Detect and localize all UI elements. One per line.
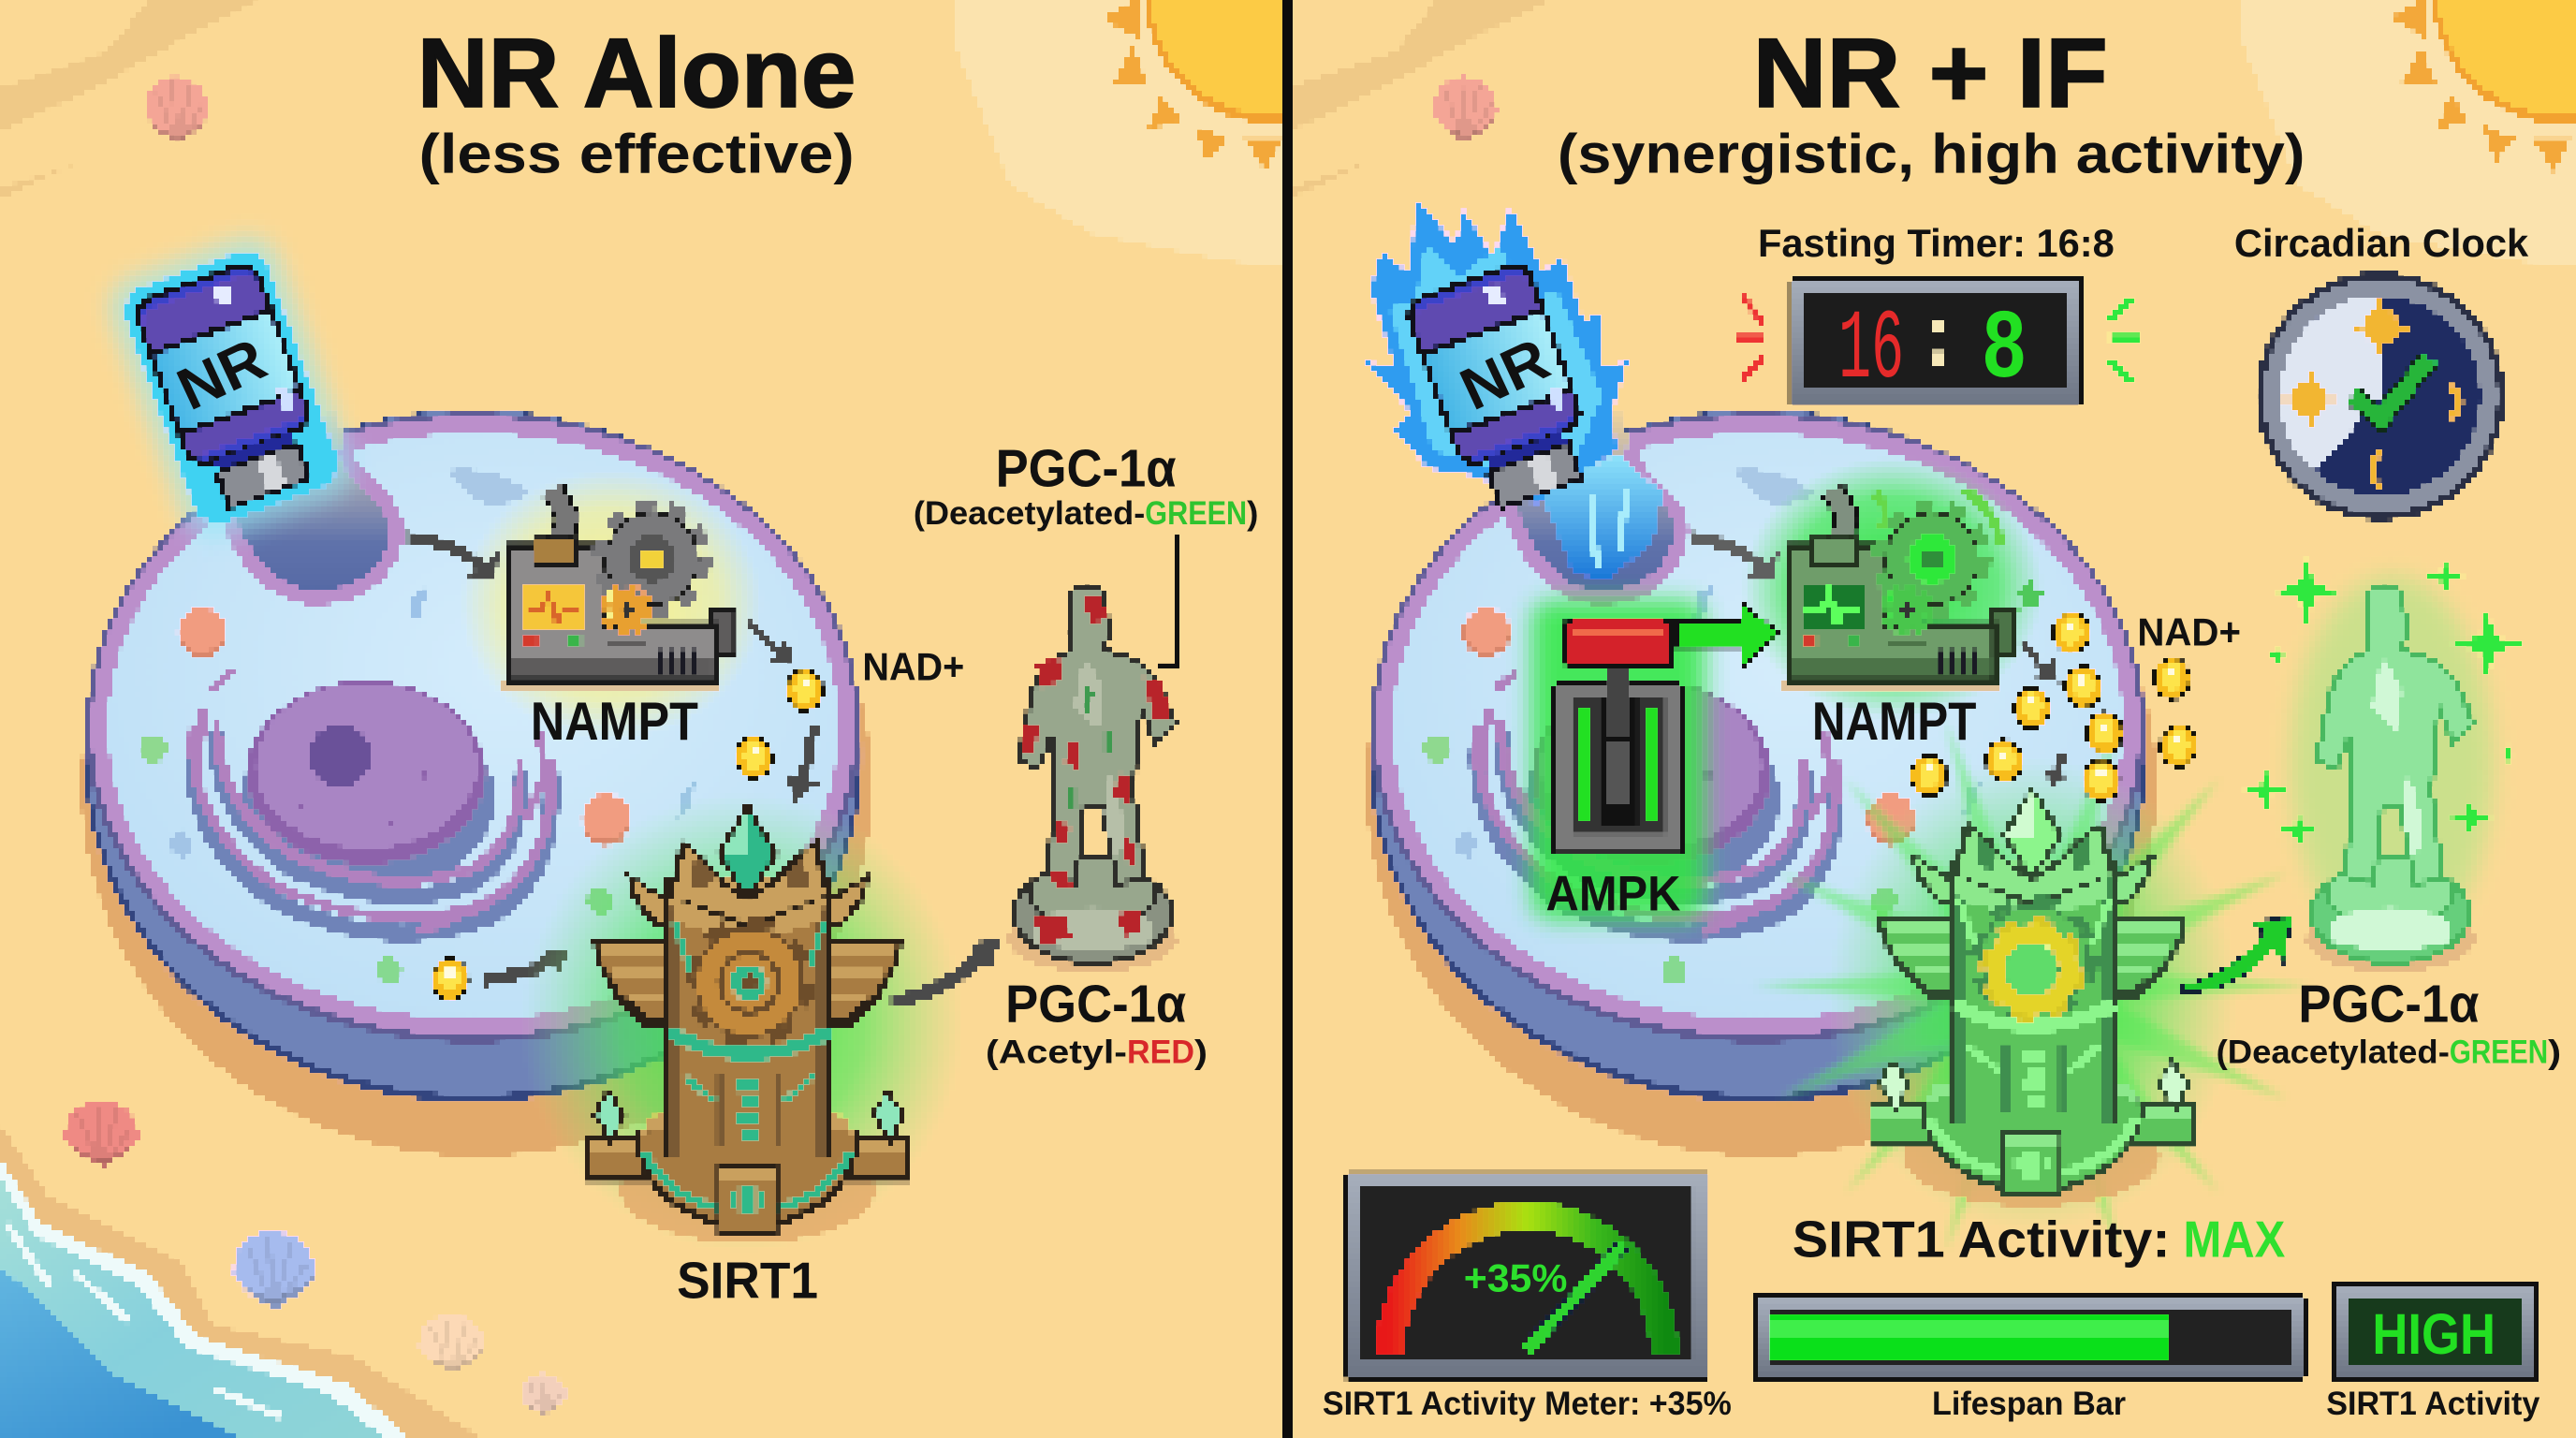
HIGH indicator text: HIGH: [2372, 1302, 2496, 1367]
sublabel: deacetylated right: ): [2548, 1034, 2561, 1071]
sublabel: Deacetylated green top: (Deacetylated-: [914, 495, 1145, 532]
heading: circadian clock: Circadian Clock: [2234, 221, 2529, 265]
right green sparkle near NAMPT: [2012, 575, 2045, 611]
label: NAMPT left: NAMPT: [531, 692, 698, 752]
shell: blue: [233, 1231, 315, 1310]
left SIRT1 green glow: [520, 792, 964, 1252]
right SIRT1 tower: [1868, 784, 2197, 1207]
left SIRT1 tower: [583, 800, 912, 1244]
left arrow: NAD+ into SIRT1: [483, 948, 572, 988]
sublabel: Acetyl red: ): [1194, 1034, 1208, 1071]
heading: fasting timer: Fasting Timer: 16:8: [1758, 221, 2115, 265]
label: NAD+ left: NAD+: [862, 645, 964, 689]
left arrow: SIRT1 to PGC-1a: [890, 938, 1001, 1007]
AMPK switch: [1553, 616, 1684, 856]
shell: small: [520, 1373, 567, 1416]
ocean shoreline: [0, 1123, 485, 1438]
left NR bottle glow: [100, 227, 361, 548]
beam streaks: [1590, 490, 1627, 567]
right NR bottle: [1400, 257, 1605, 519]
left arrow: NAD+ to SIRT1: [787, 726, 822, 805]
sublabel: Deacetylated green top: GREEN: [1145, 495, 1247, 532]
left NAD+ coins: [431, 668, 825, 1002]
lifespan bar frame and fill: [1751, 1295, 2306, 1380]
right NAMPT green glow: [1741, 457, 2043, 720]
AMPK switch glow: [1531, 600, 1705, 920]
sublabel: Deacetylated green top: [914, 495, 1258, 532]
gauge arc: [1390, 1216, 1664, 1354]
acetylated statue: [1007, 585, 1178, 973]
label: PGC-1a left bottom: PGC-1α: [1005, 975, 1186, 1034]
right NAMPT machine: [1781, 488, 2016, 694]
gauge needle: [1526, 1244, 1625, 1351]
title: NR + IF: NR + IF: [1753, 19, 2108, 128]
right cell: [1365, 409, 2157, 1157]
circadian clock: [2256, 271, 2506, 521]
right tower yellow gear: [1984, 922, 2080, 1017]
timer digits red: 16: [1838, 294, 1904, 406]
right SIRT1 light rays: [1753, 720, 2311, 1252]
label: AMPK: AMPK: [1546, 866, 1680, 921]
fasting timer display: [1734, 276, 2139, 407]
shell: pink right panel: [1432, 76, 1499, 144]
sublabel: deacetylated right: GREEN: [2450, 1034, 2548, 1071]
gauge value: +35%: [1464, 1256, 1567, 1300]
caption: SIRT1 activity: SIRT1 Activity: [2326, 1386, 2540, 1422]
shell: red: [64, 1099, 139, 1168]
sublabel: Deacetylated green top: ): [1247, 495, 1258, 532]
shell: peach: [419, 1314, 485, 1373]
left arrow: NAMPT to NAD+: [746, 620, 795, 668]
SIRT1 activity meter panel: [1344, 1171, 1710, 1380]
caption: SIRT1 meter: SIRT1 Activity Meter: +35%: [1323, 1386, 1732, 1422]
left arrow: intake to NAMPT: [407, 531, 500, 581]
label: NAD+ right: NAD+: [2137, 610, 2241, 654]
HIGH indicator panel: [2331, 1284, 2539, 1380]
deacetylated green statue: [2305, 585, 2476, 973]
sublabel: Acetyl red: RED: [1127, 1034, 1194, 1071]
left cell: [80, 409, 872, 1157]
label: SIRT1 left: SIRT1: [677, 1253, 818, 1310]
right SIRT1 glow: [1827, 756, 2237, 1232]
green glow of activated statue: [2291, 575, 2494, 953]
left beach sky corner: sun and sand swirls: [0, 0, 1406, 265]
subtitle: less effective: (less effective): [419, 122, 855, 184]
right arrow: intake to NAMPT: [1690, 531, 1779, 581]
right NAMPT energy arcs: [1873, 490, 2001, 546]
left NAMPT yellow glow: [460, 470, 762, 740]
shell: pink top left: [144, 76, 211, 144]
sublabel: deacetylated right: [2217, 1034, 2561, 1071]
right arrow: SIRT1 to PGC-1a: [2178, 917, 2291, 992]
left NAMPT machine: [501, 488, 736, 694]
title: NR Alone: NR Alone: [417, 19, 856, 128]
sublabel: Acetyl red: (Acetyl-: [986, 1034, 1127, 1071]
label: PGC-1a right: PGC-1α: [2298, 975, 2479, 1034]
caption: lifespan bar: Lifespan Bar: [1932, 1386, 2126, 1422]
label: NAMPT right: NAMPT: [1812, 692, 1976, 752]
heading: SIRT1 activity MAX: SIRT1 Activity:: [1793, 1211, 2170, 1269]
right panel background: [1293, 0, 2576, 265]
timer digit green: 8: [1982, 294, 2027, 406]
right arrow: NAD+ to SIRT1: [2043, 751, 2070, 790]
NAD+ coins, activated: [1909, 610, 2198, 802]
left bottle label: NR: [168, 326, 276, 423]
sublabel: Acetyl red: [986, 1034, 1208, 1071]
AMPK arrow: [1676, 601, 1779, 668]
label: PGC-1a top: PGC-1α: [996, 439, 1177, 498]
pointer from label to statue: [1158, 534, 1178, 664]
subtitle: synergistic: (synergistic, high activity): [1558, 122, 2305, 184]
heading: SIRT1 activity MAX: MAX: [2184, 1211, 2285, 1269]
sublabel: deacetylated right: (Deacetylated-: [2217, 1034, 2450, 1071]
sparkles around statue: [2243, 557, 2524, 849]
left NR bottle: [128, 257, 334, 519]
blue flame around bottle: [1365, 198, 1628, 505]
right bottle label: NR: [1451, 326, 1559, 423]
right arrow: NAMPT to NAD+: [2019, 638, 2060, 683]
blue energy beam into notch: [1541, 453, 1662, 579]
divider: [1282, 0, 1293, 1438]
